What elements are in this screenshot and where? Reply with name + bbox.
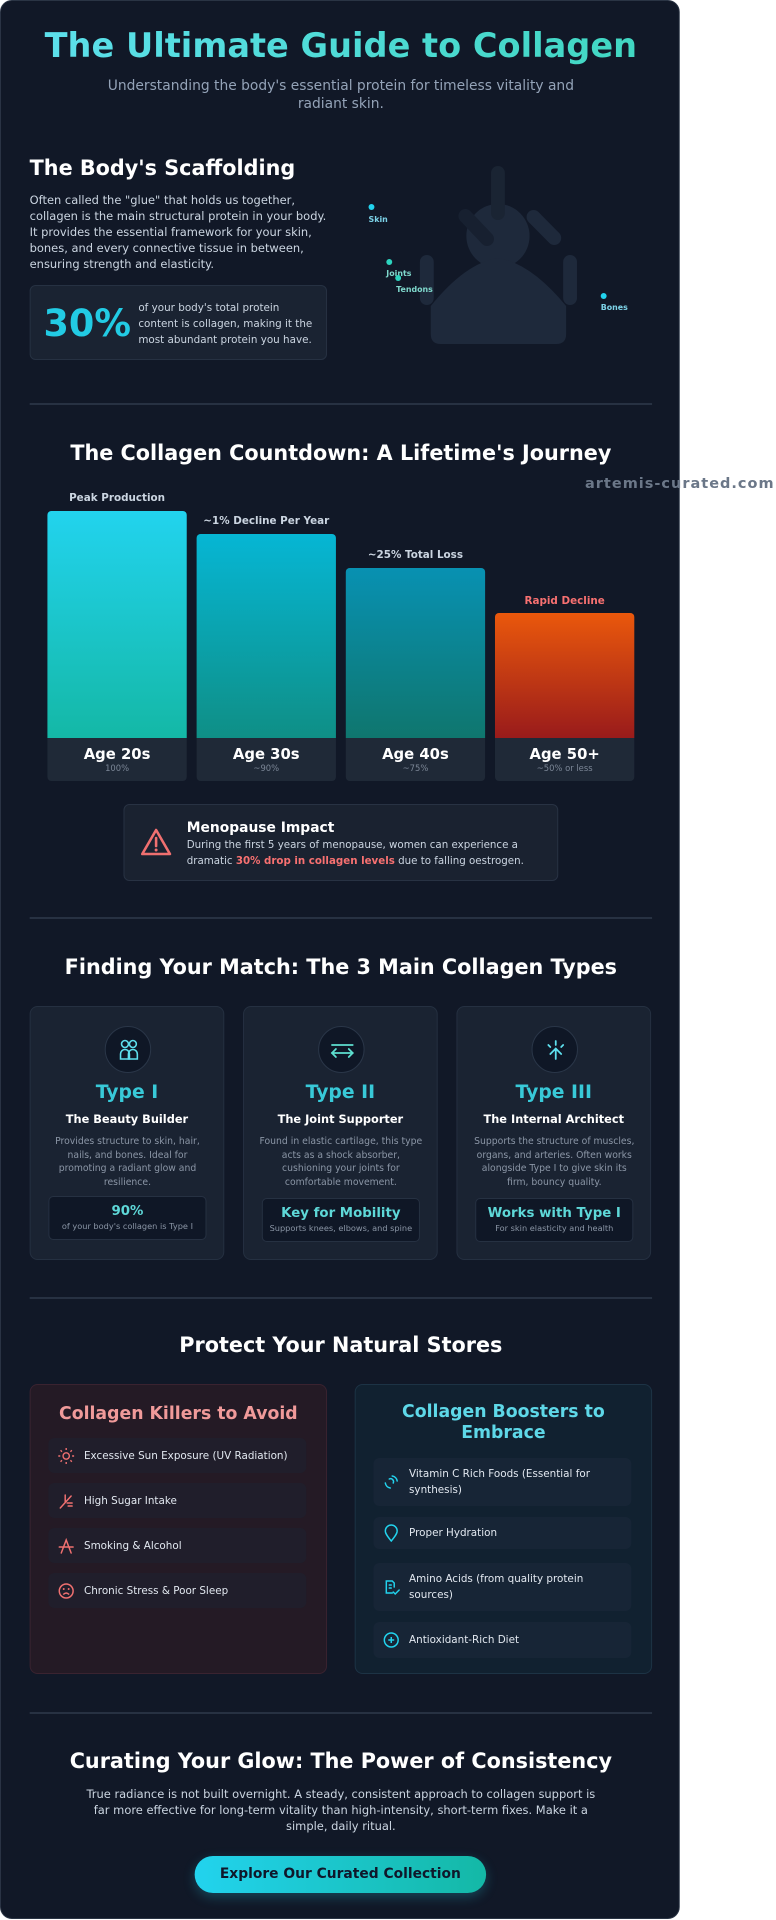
button: CTA: Explore Our Curated Collection	[220, 1866, 461, 1882]
button: CTA	[195, 1856, 486, 1893]
icon: burst	[532, 1026, 578, 1073]
section heading: body's scaffolding: The Body's Scaffolding	[30, 156, 295, 180]
bar chart: collagen by age: 100%	[105, 764, 129, 774]
section heading: consistency: Curating Your Glow: The Power of Consistency	[70, 1749, 612, 1773]
bar chart: collagen by age: ~1% Decline Per Year	[203, 515, 329, 527]
illustration: body figure with labels: Joints	[385, 269, 412, 278]
panel: type II: The Joint Supporter	[278, 1112, 403, 1126]
bar chart: collagen by age: Age 20s	[84, 745, 150, 763]
panel: type III: For skin elasticity and health	[495, 1223, 613, 1233]
illustration: body figure with labels: Tendons	[396, 285, 433, 294]
title: The Ultimate Guide to Collagen	[45, 26, 637, 66]
bar chart: collagen by age	[47, 492, 634, 781]
illustration: body figure with labels: Bones	[601, 303, 628, 312]
item: antioxidant: Antioxidant-Rich Diet	[409, 1634, 519, 1646]
panel: type III: Type III	[516, 1081, 592, 1103]
item: smoking	[48, 1528, 306, 1563]
panel: collagen boosters	[355, 1384, 652, 1674]
panel: type II: Supports knees, elbows, and spine	[270, 1223, 412, 1233]
bar chart: collagen by age: ~90%	[253, 764, 279, 774]
panel: type II: Found in elastic cartilage, this type acts as a shock absorber, cushioning your joints for comfortable movement.	[260, 1136, 422, 1188]
panel: type I: Provides structure to skin, hair, nails, and bones. Ideal for promoting a radiant glow and resilience.	[55, 1136, 200, 1188]
icon: warning	[141, 828, 172, 856]
illustration: body figure with labels: Skin	[369, 215, 388, 224]
bar chart: collagen by age: Peak Production	[69, 492, 165, 504]
item: sugar: High Sugar Intake	[84, 1494, 177, 1506]
item: hydration: Proper Hydration	[409, 1527, 497, 1539]
panel: type I: The Beauty Builder	[66, 1112, 188, 1126]
panel: type III	[456, 1006, 651, 1260]
illustration: body figure with labels	[368, 166, 628, 344]
item: sugar	[48, 1483, 306, 1518]
panel: type I: 90%	[111, 1203, 143, 1219]
bar chart: collagen by age: Age 30s	[233, 745, 300, 763]
stat callout: 30%	[30, 285, 327, 360]
item: sun	[48, 1438, 306, 1473]
section heading: collagen countdown: The Collagen Countdown: A Lifetime's Journey	[70, 441, 611, 465]
panel: type I: Type I	[96, 1081, 158, 1103]
callout: menopause impact: Menopause Impact	[187, 820, 334, 836]
panel: type III: The Internal Architect	[483, 1112, 624, 1126]
panel: collagen killers: Collagen Killers to Avoid	[59, 1404, 298, 1424]
item: stress	[48, 1573, 306, 1608]
item: vitamin C	[373, 1458, 631, 1506]
item: antioxidant	[373, 1622, 631, 1658]
panel: type I	[30, 1006, 224, 1260]
section heading: collagen types: Finding Your Match: The 3 Main Collagen Types	[65, 955, 617, 979]
item: hydration	[373, 1517, 631, 1549]
text block: consistency: True radiance is not built overnight. A steady, consistent approach to collagen support is far more effective for long-term vitality than high-intensity, short-term fixes. Make it a simple, daily ritual.	[86, 1787, 595, 1833]
watermark: artemis-curated.com	[585, 476, 775, 492]
item: stress: Chronic Stress & Poor Sleep	[84, 1584, 228, 1596]
icon: arrows	[318, 1026, 365, 1073]
item: sun: Excessive Sun Exposure (UV Radiation)	[84, 1450, 288, 1462]
stat callout: 30%: of your body's total protein content is collagen, making it the most abundant protein you have.	[138, 302, 312, 346]
item: smoking: Smoking & Alcohol	[84, 1540, 182, 1552]
callout: menopause impact: During the first 5 years of menopause, women can experience a dramatic 30% drop in collagen levels due to falling oestrogen.	[187, 839, 524, 867]
item: amino acids	[373, 1563, 631, 1611]
icon: people	[105, 1026, 151, 1073]
bar chart: collagen by age: Age 50+	[529, 745, 600, 763]
text block: scaffolding description: Often called the "glue" that holds us together, collagen is the main structural protein in your body. It provides the essential framework for your skin, bones, and every connective tissue in between, ensuring strength and elasticity.	[30, 193, 326, 271]
panel: collagen killers	[30, 1384, 327, 1674]
subtitle: Understanding the body's essential protein for timeless vitality and radiant skin.	[108, 78, 574, 112]
bar chart: collagen by age: Age 40s	[382, 745, 449, 763]
panel: collagen boosters: Collagen Boosters to	[402, 1402, 605, 1422]
panel: type III: Supports the structure of muscles, organs, and arteries. Often works alongside Type I to give skin its firm, bouncy quality.	[474, 1136, 634, 1188]
panel: type III: Works with Type I	[488, 1205, 621, 1221]
bar chart: collagen by age: Rapid Decline	[524, 595, 605, 607]
bar chart: collagen by age: ~50% or less	[537, 764, 593, 774]
panel: type I: of your body's collagen is Type I	[62, 1221, 193, 1231]
bar chart: collagen by age: ~25% Total Loss	[368, 549, 463, 561]
bar chart: collagen by age: ~75%	[403, 764, 428, 774]
section heading: protect: Protect Your Natural Stores	[179, 1333, 502, 1357]
panel: type II: Type II	[306, 1081, 375, 1103]
stat callout: 30%: 30%	[43, 302, 131, 345]
item: vitamin C: Vitamin C Rich Foods (Essential for synthesis)	[409, 1468, 590, 1496]
panel: type II	[243, 1006, 438, 1260]
panel: collagen boosters: Embrace	[461, 1423, 546, 1443]
callout: menopause impact	[124, 804, 558, 881]
panel: type II: Key for Mobility	[281, 1205, 401, 1221]
item: amino acids: Amino Acids (from quality protein sources)	[409, 1573, 583, 1601]
